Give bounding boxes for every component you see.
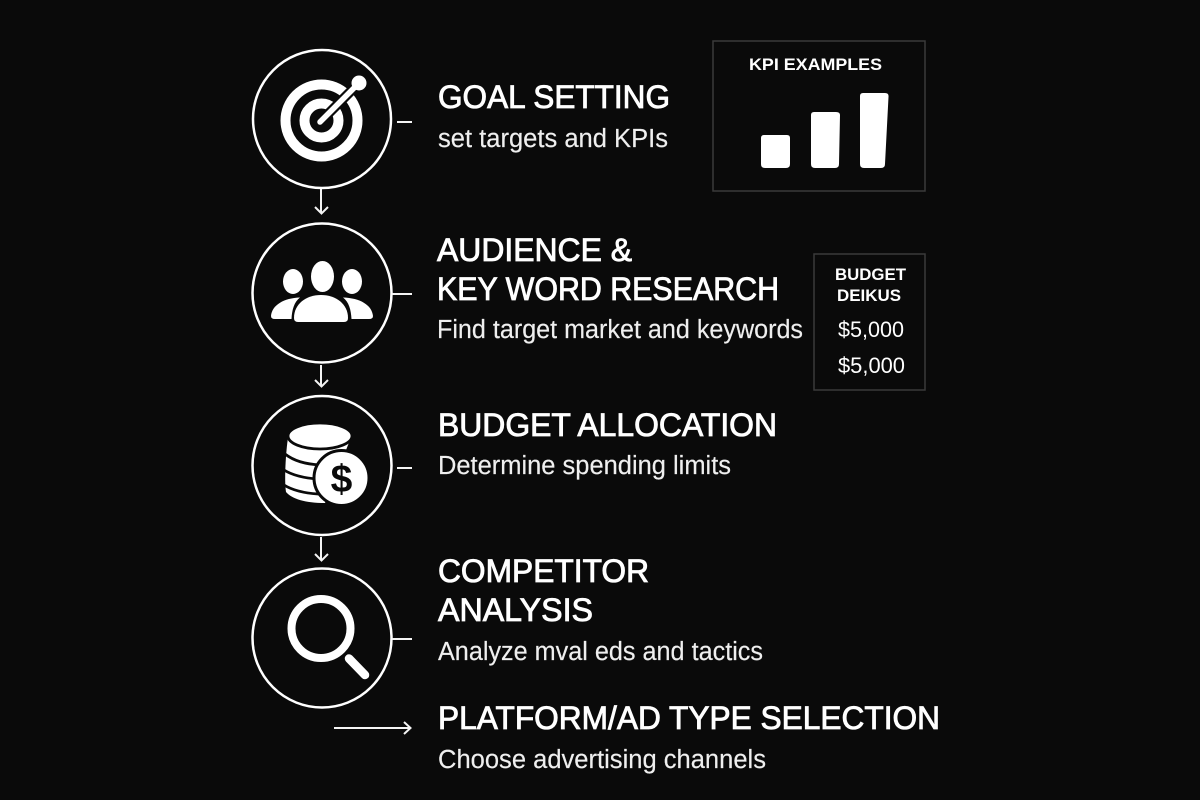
heading: goal setting: GOAL SETTING: [438, 79, 670, 115]
budget amount 2: $5,000: [838, 353, 905, 378]
connector tick 3: [397, 467, 412, 469]
arrow: step 2 to 3: [315, 365, 328, 386]
description: budget allocation: Determine spending limits: [438, 452, 731, 480]
connector tick 1: [397, 121, 412, 123]
step 4: competitor analysis: [252, 553, 763, 708]
step 4 circle: [252, 568, 392, 708]
budget panel title: DEIKUS: [837, 287, 901, 305]
heading: competitor analysis: ANALYSIS: [438, 592, 593, 628]
step 1: goal setting: [253, 50, 670, 188]
heading: audience and keyword research: KEY WORD RESEARCH: [437, 271, 779, 307]
icon: group of people: [271, 261, 373, 322]
step 2 circle: [252, 224, 392, 362]
step 3 circle: [252, 396, 392, 535]
description: goal setting: set targets and KPIs: [438, 125, 668, 153]
budget panel title: BUDGET: [835, 266, 906, 284]
heading: audience and keyword research: [437, 232, 779, 307]
description: competitor analysis: Analyze mval eds and tactics: [438, 638, 763, 666]
budget panel title: [835, 266, 906, 305]
step 3: budget allocation: [252, 396, 777, 535]
icon: coin stack with dollar: [284, 423, 369, 506]
heading: platform and ad type selection: PLATFORM/AD TYPE SELECTION: [438, 700, 940, 736]
connector tick 2: [392, 293, 412, 295]
connector tick 4: [392, 638, 412, 640]
heading: competitor analysis: [438, 553, 649, 628]
icon: magnifying glass: [292, 599, 365, 675]
heading: budget allocation: BUDGET ALLOCATION: [438, 407, 777, 443]
step 1 circle: [253, 50, 391, 188]
arrow: step 1 to 2: [315, 189, 328, 214]
panel: KPI examples: [713, 41, 925, 191]
heading: competitor analysis: COMPETITOR: [438, 553, 649, 589]
heading: audience and keyword research: AUDIENCE &: [437, 232, 632, 268]
step 2: audience and keyword research: [252, 224, 803, 362]
icon: target with dart: [286, 76, 366, 156]
description: audience and keyword research: Find target market and keywords: [437, 316, 803, 344]
dollar sign: $: [331, 458, 353, 501]
arrow: step 3 to 4: [315, 537, 328, 560]
arrow: to platform selection: [334, 722, 410, 734]
KPI panel title: KPI EXAMPLES: [749, 56, 882, 74]
panel: budget details: [814, 254, 925, 390]
step 5: platform and ad type selection: [334, 700, 940, 774]
budget amount 1: $5,000: [838, 317, 904, 342]
description: platform and ad type selection: Choose advertising channels: [438, 746, 766, 774]
bar chart: [761, 93, 889, 168]
